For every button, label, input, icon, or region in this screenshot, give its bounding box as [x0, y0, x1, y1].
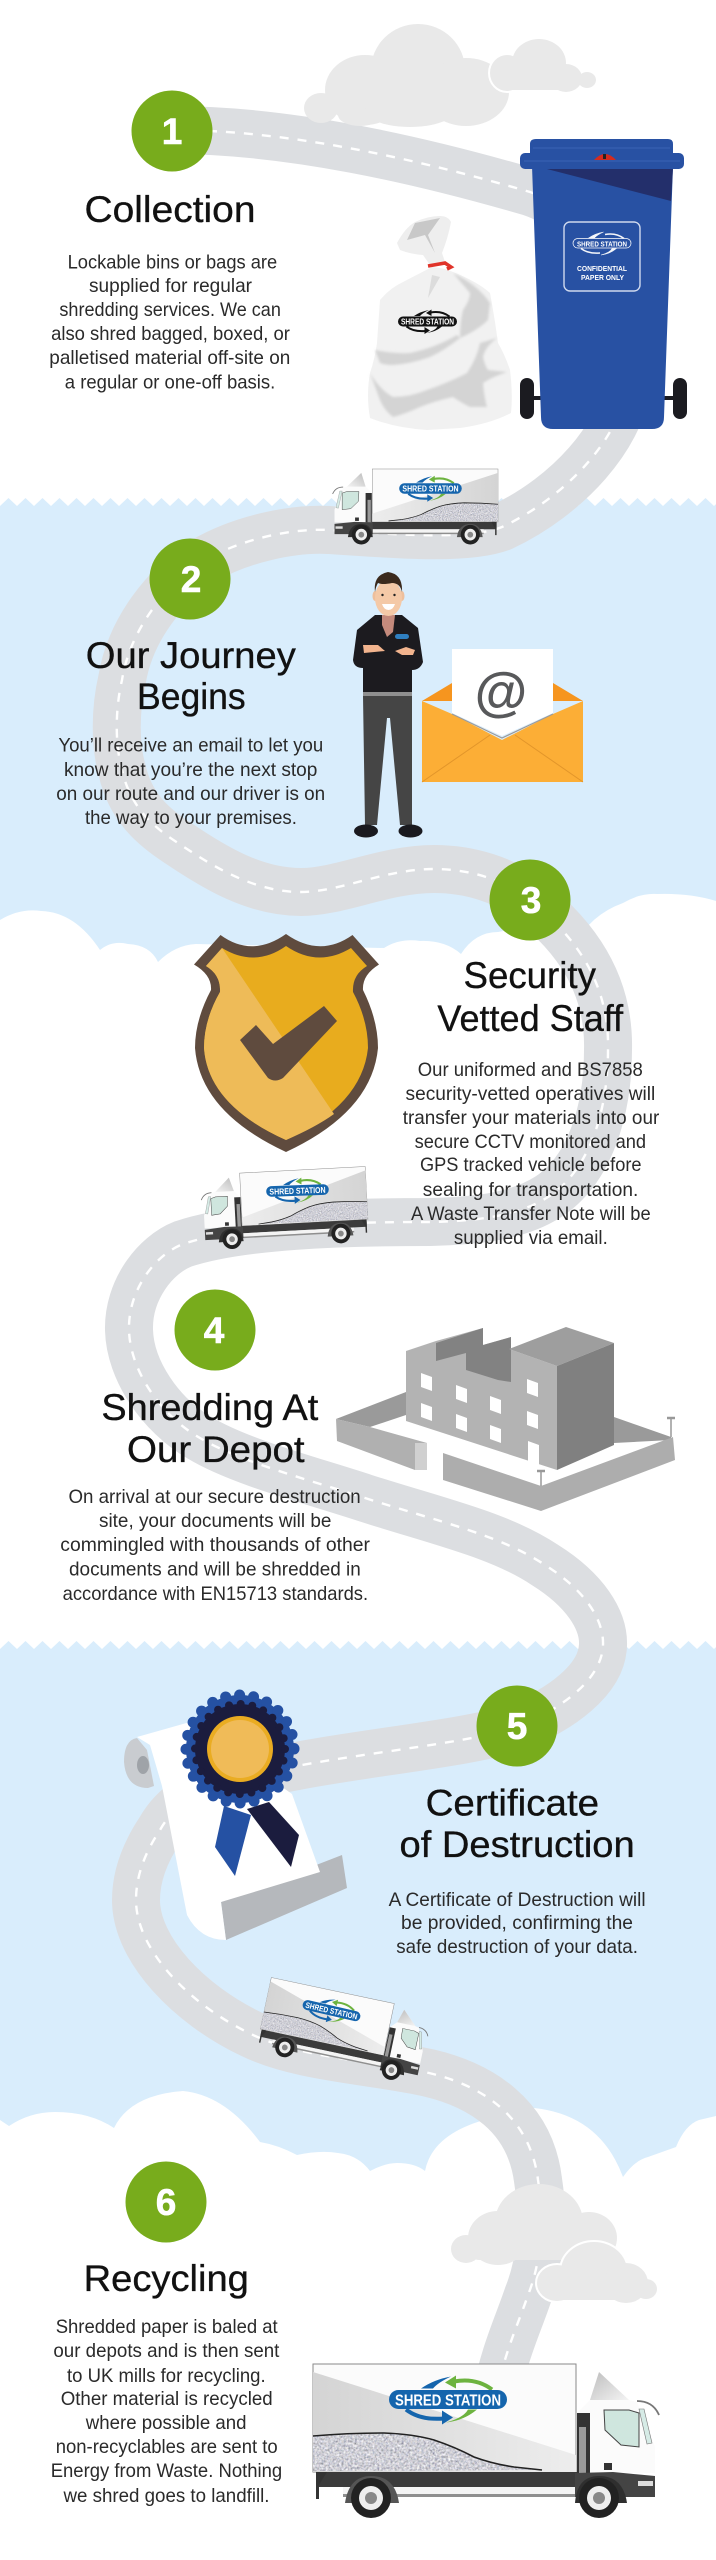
- top clouds: [304, 24, 596, 127]
- step 6 body text: to UK mills for recycling.: [67, 2365, 266, 2387]
- step 5 body text: A Certificate of Destruction will: [389, 1889, 646, 1911]
- step 1 body text: Lockable bins or bags are: [68, 252, 277, 274]
- step 3 heading: Vetted Staff: [437, 998, 624, 1039]
- step 5 body text: be provided, confirming the: [401, 1912, 633, 1934]
- icon: email envelope: @: [475, 662, 527, 722]
- winding road: [117, 130, 628, 2400]
- step 3 body text: transfer your materials into our: [403, 1107, 660, 1129]
- step 1 body text: [49, 252, 290, 394]
- truck on road, step 5 to 6: [256, 1977, 433, 2086]
- icon: driver in uniform: [353, 572, 423, 838]
- step 4 body text: [60, 1486, 370, 1605]
- step 1 body text: a regular or one-off basis.: [65, 372, 275, 394]
- step 3 body text: [403, 1059, 660, 1249]
- large recycling truck: SHRED STATION: [395, 2392, 501, 2410]
- step 1 number badge: [132, 90, 212, 172]
- step 5 heading: [400, 1782, 635, 1865]
- truck on road, step 3 to 4: [200, 1167, 369, 1251]
- step 4 number badge: 4: [204, 1310, 225, 1351]
- step 6 body text: Shredded paper is baled at: [56, 2316, 278, 2338]
- step 4 body text: site, your documents will be: [99, 1510, 331, 1532]
- step 1 body text: shredding services. We can: [59, 299, 281, 321]
- step 5 body text: safe destruction of your data.: [396, 1936, 638, 1958]
- step 1 heading: Collection: [84, 189, 256, 230]
- step 2 body text: You’ll receive an email to let you: [58, 734, 323, 756]
- step 4 body text: commingled with thousands of other: [60, 1534, 370, 1556]
- icon: blue confidential bin: PAPER ONLY: [581, 275, 624, 282]
- icon: shredding bag: SHRED STATION: [401, 318, 454, 326]
- step 1 body text: supplied for regular: [89, 275, 252, 297]
- icon: email envelope: [422, 649, 583, 782]
- step 3 body text: security-vetted operatives will: [406, 1083, 655, 1105]
- step 5 heading: of Destruction: [400, 1824, 635, 1865]
- step 4 body text: documents and will be shredded in: [69, 1558, 361, 1580]
- step 6 body text: Energy from Waste. Nothing: [51, 2460, 282, 2482]
- step 2 heading: Begins: [137, 676, 246, 717]
- step 6 number badge: [126, 2162, 206, 2242]
- icon: shredding bag: [368, 216, 512, 430]
- icon: blue confidential bin: CONFIDENTIAL: [577, 266, 628, 273]
- step 5 heading: Certificate: [426, 1782, 599, 1824]
- step 6 body text: Other material is recycled: [61, 2388, 273, 2410]
- icon: security shield: [194, 934, 379, 1152]
- step 3 body text: supplied via email.: [454, 1227, 608, 1249]
- lower clouds: [451, 2184, 657, 2303]
- step 3 body text: A Waste Transfer Note will be: [411, 1203, 651, 1225]
- step 3 body text: secure CCTV monitored and: [415, 1131, 646, 1153]
- step 2 number badge: 2: [181, 559, 201, 600]
- icon: shredding depot building: [336, 1327, 675, 1511]
- step 3 heading: Security: [464, 955, 596, 996]
- icon: blue confidential bin: SHRED STATION: [577, 239, 627, 248]
- step 4 heading: Shredding At: [101, 1387, 319, 1428]
- step 4 heading: Our Depot: [127, 1429, 305, 1470]
- step 1 body text: also shred bagged, boxed, or: [51, 323, 290, 345]
- step 4 body text: accordance with EN15713 standards.: [63, 1583, 368, 1605]
- step 6 heading: Recycling: [84, 2258, 249, 2299]
- icon: blue confidential bin: [520, 139, 687, 429]
- step 6 body text: where possible and: [85, 2412, 247, 2434]
- step 6 body text: [51, 2316, 282, 2507]
- step 5 number badge: 5: [507, 1706, 527, 1747]
- step 4 body text: On arrival at our secure destruction: [68, 1486, 361, 1508]
- step 5 body text: [389, 1889, 646, 1958]
- step 2 heading: Our Journey: [86, 635, 296, 676]
- truck on road, step 3 to 4: SHRED STATION: [269, 1185, 326, 1197]
- step 6 number badge: 6: [156, 2182, 176, 2223]
- step 4 number badge: [174, 1290, 256, 1370]
- step 2 body text: on our route and our driver is on: [56, 783, 325, 805]
- truck on road, step 1 to 2: [333, 469, 498, 544]
- step 2 heading: [86, 635, 296, 717]
- step 6 body text: non-recyclables are sent to: [56, 2436, 278, 2458]
- step 2 body text: [56, 734, 325, 829]
- icon: certificate scroll with rosette: [124, 1695, 347, 1940]
- step 2 number badge: [150, 538, 230, 620]
- step 3 body text: GPS tracked vehicle before: [420, 1154, 642, 1176]
- step 3 heading: [437, 955, 624, 1039]
- large recycling truck: [313, 2364, 659, 2518]
- step 3 number badge: 3: [521, 880, 541, 921]
- step 4 heading: [101, 1387, 319, 1470]
- step 6 body text: we shred goes to landfill.: [63, 2485, 269, 2507]
- step 5 number badge: [476, 1686, 558, 1766]
- step 2 body text: the way to your premises.: [85, 807, 297, 829]
- step 3 body text: Our uniformed and BS7858: [418, 1059, 643, 1081]
- step 3 body text: sealing for transportation.: [423, 1179, 638, 1201]
- step 1 number badge: 1: [162, 111, 182, 152]
- truck on road, step 1 to 2: SHRED STATION: [402, 484, 459, 494]
- step 6 body text: our depots and is then sent: [53, 2340, 280, 2362]
- truck on road, step 5 to 6: SHRED STATION: [305, 2001, 358, 2021]
- step 2 body text: know that you’re the next stop: [64, 759, 318, 781]
- step 3 number badge: [490, 860, 570, 940]
- step 1 body text: palletised material off-site on: [49, 347, 290, 369]
